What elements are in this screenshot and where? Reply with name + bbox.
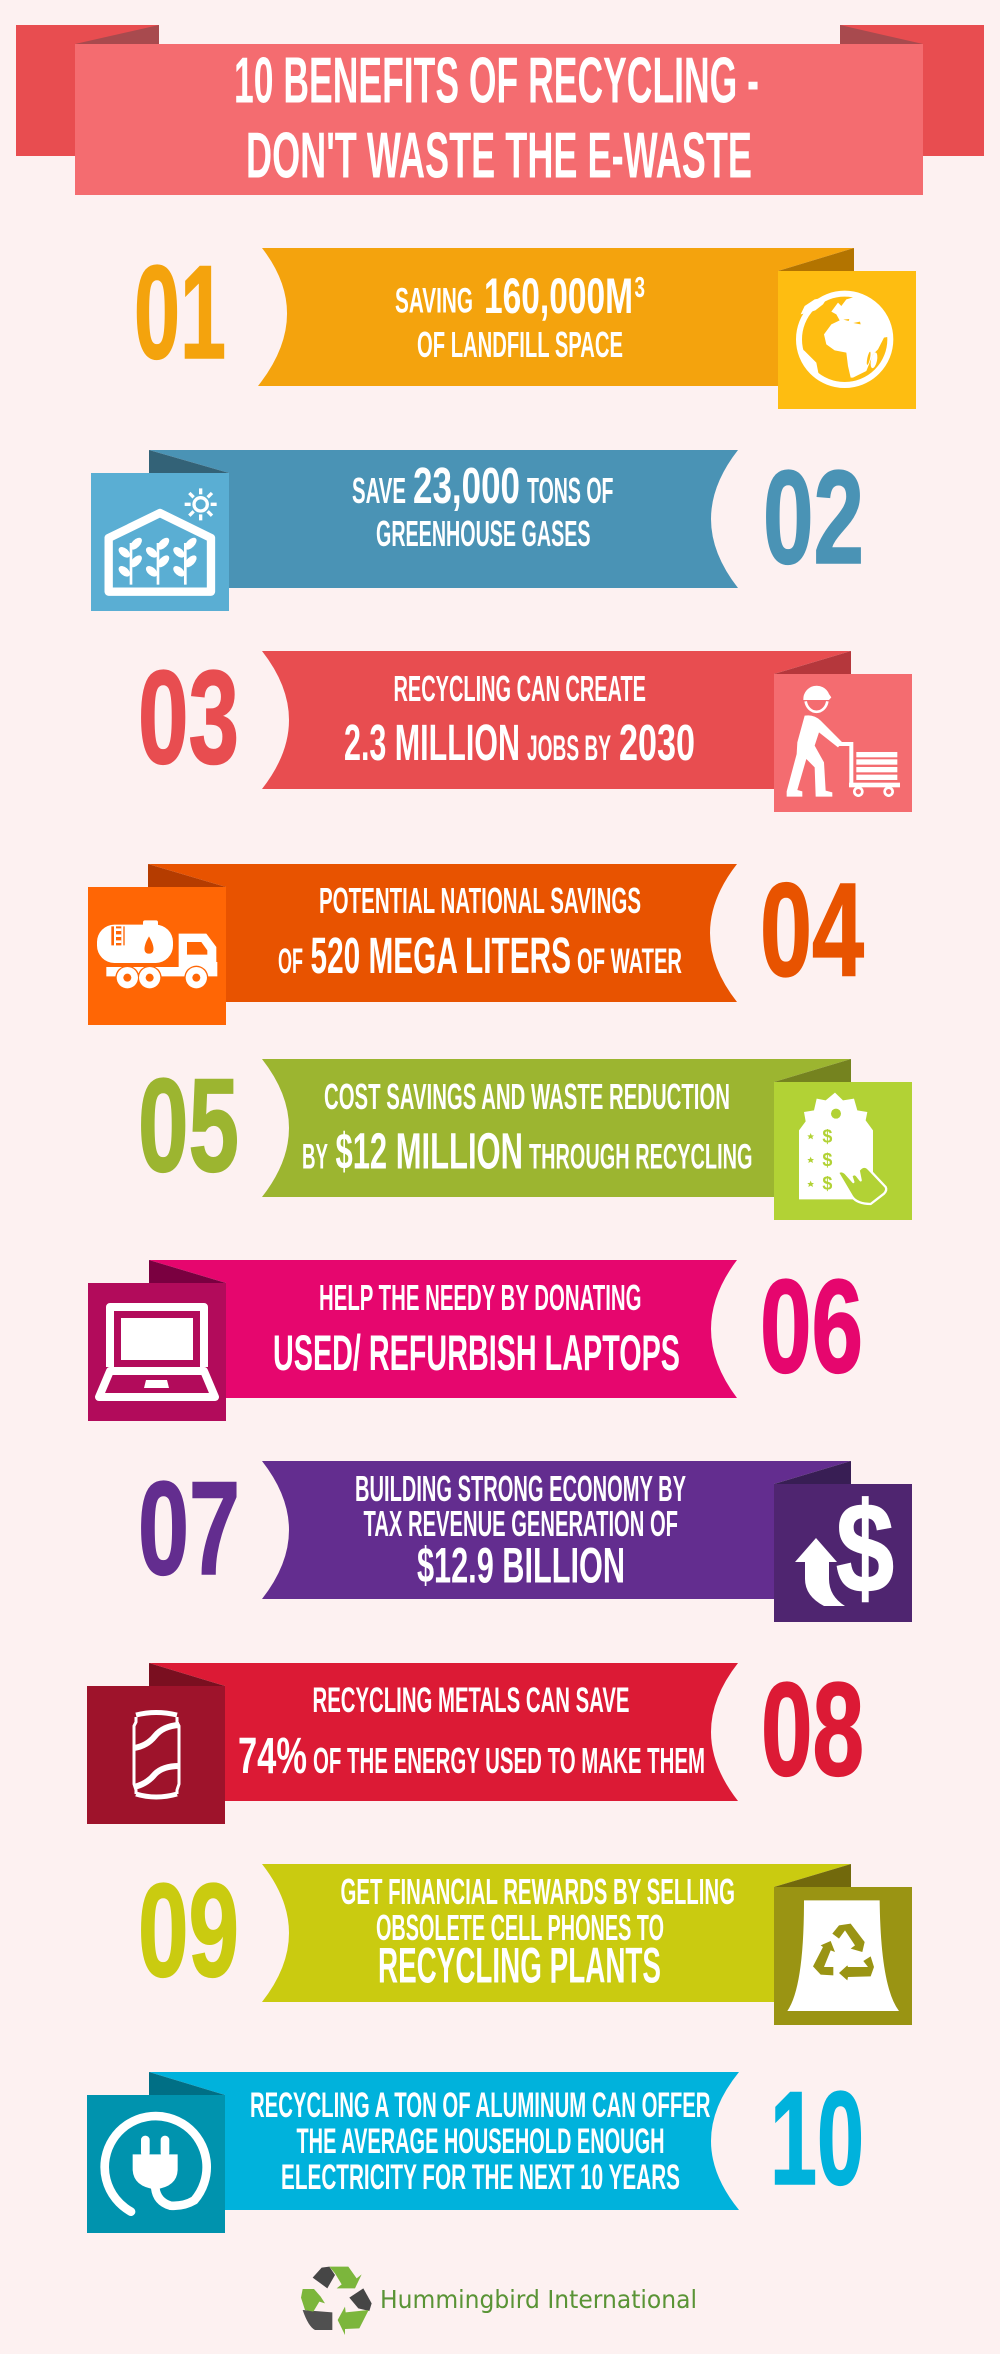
text 09 bbox=[340, 1871, 735, 1994]
item 02 bbox=[91, 444, 864, 611]
text 08: RECYCLING METALS CAN SAVE bbox=[312, 1681, 630, 1720]
text 10: THE AVERAGE HOUSEHOLD ENOUGH bbox=[296, 2122, 664, 2161]
text 02: SAVE bbox=[352, 470, 406, 511]
icon: globe bbox=[778, 271, 916, 409]
ribbon 06 bbox=[149, 1260, 737, 1398]
number 04: 04 bbox=[760, 856, 864, 1004]
number 06: 06 bbox=[760, 1253, 863, 1401]
text 04: OF WATER bbox=[577, 942, 682, 981]
icon: can bbox=[87, 1686, 225, 1824]
text 04: 520 MEGA LITERS bbox=[310, 927, 571, 984]
text 05: $12 MILLION bbox=[336, 1122, 523, 1180]
text 03 bbox=[344, 668, 695, 771]
text 06 bbox=[273, 1277, 680, 1381]
text 04: OF bbox=[278, 942, 303, 981]
item 01 bbox=[134, 239, 916, 409]
text 05 bbox=[302, 1076, 752, 1180]
fold 10 bbox=[149, 2072, 225, 2095]
text 01: 3 bbox=[634, 272, 645, 304]
fold 01 bbox=[778, 248, 854, 271]
number 10: 10 bbox=[770, 2065, 864, 2213]
ribbon 07 bbox=[262, 1461, 851, 1599]
text 06: HELP THE NEEDY BY DONATING bbox=[319, 1277, 642, 1318]
text 02: GREENHOUSE GASES bbox=[376, 513, 590, 554]
icon: laptop bbox=[88, 1283, 226, 1421]
icon: worker with cart bbox=[774, 674, 912, 812]
text 04 bbox=[278, 880, 682, 984]
text 02: TONS OF bbox=[527, 470, 614, 511]
text 07: $12.9 BILLION bbox=[417, 1538, 625, 1594]
item 08 bbox=[87, 1656, 864, 1824]
icon: tanker truck bbox=[88, 887, 226, 1025]
item 05 bbox=[138, 1052, 912, 1220]
fold 02 bbox=[149, 450, 229, 473]
text 07: TAX REVENUE GENERATION OF bbox=[364, 1503, 678, 1544]
item 04 bbox=[88, 856, 864, 1025]
fold 03 bbox=[774, 651, 851, 674]
item 09 bbox=[138, 1857, 912, 2025]
text 06: USED/ REFURBISH LAPTOPS bbox=[273, 1325, 680, 1381]
text 10 bbox=[250, 2086, 710, 2197]
text 07 bbox=[355, 1468, 686, 1594]
text 02 bbox=[352, 457, 614, 554]
text 08: OF THE ENERGY USED TO MAKE THEM bbox=[313, 1740, 705, 1781]
ribbon 04 bbox=[148, 864, 737, 1002]
number 03: 03 bbox=[138, 644, 239, 792]
title banner bbox=[16, 25, 984, 195]
icon: dollar with arrow bbox=[774, 1477, 912, 1622]
item 10 bbox=[87, 2065, 864, 2233]
ribbon 02 bbox=[149, 450, 738, 588]
title text bbox=[234, 44, 759, 192]
ribbon 10 bbox=[149, 2072, 739, 2210]
fold 09 bbox=[774, 1864, 851, 1887]
number 02: 02 bbox=[763, 444, 864, 592]
text 03: 2.3 MILLION bbox=[344, 714, 520, 771]
fold 06 bbox=[149, 1260, 226, 1283]
text 05: BY bbox=[302, 1138, 328, 1176]
text 01: 160,000M bbox=[484, 268, 633, 324]
icon: recycle logo bbox=[301, 2267, 372, 2335]
ribbon 01 bbox=[258, 248, 854, 386]
item 07 bbox=[138, 1455, 912, 1622]
text 02: 23,000 bbox=[413, 457, 520, 514]
text 08: 74% bbox=[238, 1727, 307, 1784]
ribbon 09 bbox=[262, 1864, 851, 2002]
text 07: BUILDING STRONG ECONOMY BY bbox=[355, 1468, 686, 1509]
text 01: SAVING bbox=[395, 282, 473, 321]
item 06 bbox=[88, 1253, 863, 1421]
icon: greenhouse bbox=[91, 473, 229, 611]
item 03 bbox=[138, 644, 912, 812]
number 09: 09 bbox=[138, 1857, 239, 2005]
text 09: RECYCLING PLANTS bbox=[378, 1938, 661, 1994]
text 10: ELECTRICITY FOR THE NEXT 10 YEARS bbox=[281, 2158, 680, 2197]
fold 07 bbox=[774, 1461, 851, 1484]
ribbon 03 bbox=[262, 651, 851, 789]
footer logo bbox=[301, 2267, 697, 2335]
fold 04 bbox=[148, 864, 226, 887]
icon: price tag with hand: $ bbox=[822, 1126, 833, 1147]
fold 05 bbox=[774, 1059, 851, 1082]
icon: price tag with hand bbox=[774, 1082, 912, 1220]
text 03: JOBS BY bbox=[527, 729, 611, 768]
number 08: 08 bbox=[761, 1656, 864, 1804]
icon: dollar with arrow: $ bbox=[836, 1477, 894, 1620]
text 01 bbox=[395, 268, 645, 365]
text 03: 2030 bbox=[619, 714, 695, 771]
text 04: POTENTIAL NATIONAL SAVINGS bbox=[319, 880, 641, 921]
icon: plug bbox=[87, 2095, 225, 2233]
icon: price tag with hand: $ bbox=[822, 1149, 833, 1170]
icon: price tag with hand: $ bbox=[822, 1172, 833, 1193]
company name: Hummingbird International bbox=[380, 2285, 697, 2314]
text 03: RECYCLING CAN CREATE bbox=[394, 668, 646, 709]
fold 08 bbox=[149, 1663, 225, 1686]
text 05: THROUGH RECYCLING bbox=[529, 1138, 752, 1176]
icon: recycling plant bbox=[774, 1887, 912, 2025]
text 01: OF LANDFILL SPACE bbox=[417, 324, 623, 365]
number 07: 07 bbox=[138, 1455, 240, 1603]
text 08 bbox=[238, 1681, 705, 1784]
number 05: 05 bbox=[138, 1052, 239, 1200]
ribbon 08 bbox=[149, 1663, 738, 1801]
number 01: 01 bbox=[134, 239, 226, 387]
ribbon 05 bbox=[262, 1059, 851, 1197]
text 09: OBSOLETE CELL PHONES TO bbox=[376, 1907, 664, 1948]
